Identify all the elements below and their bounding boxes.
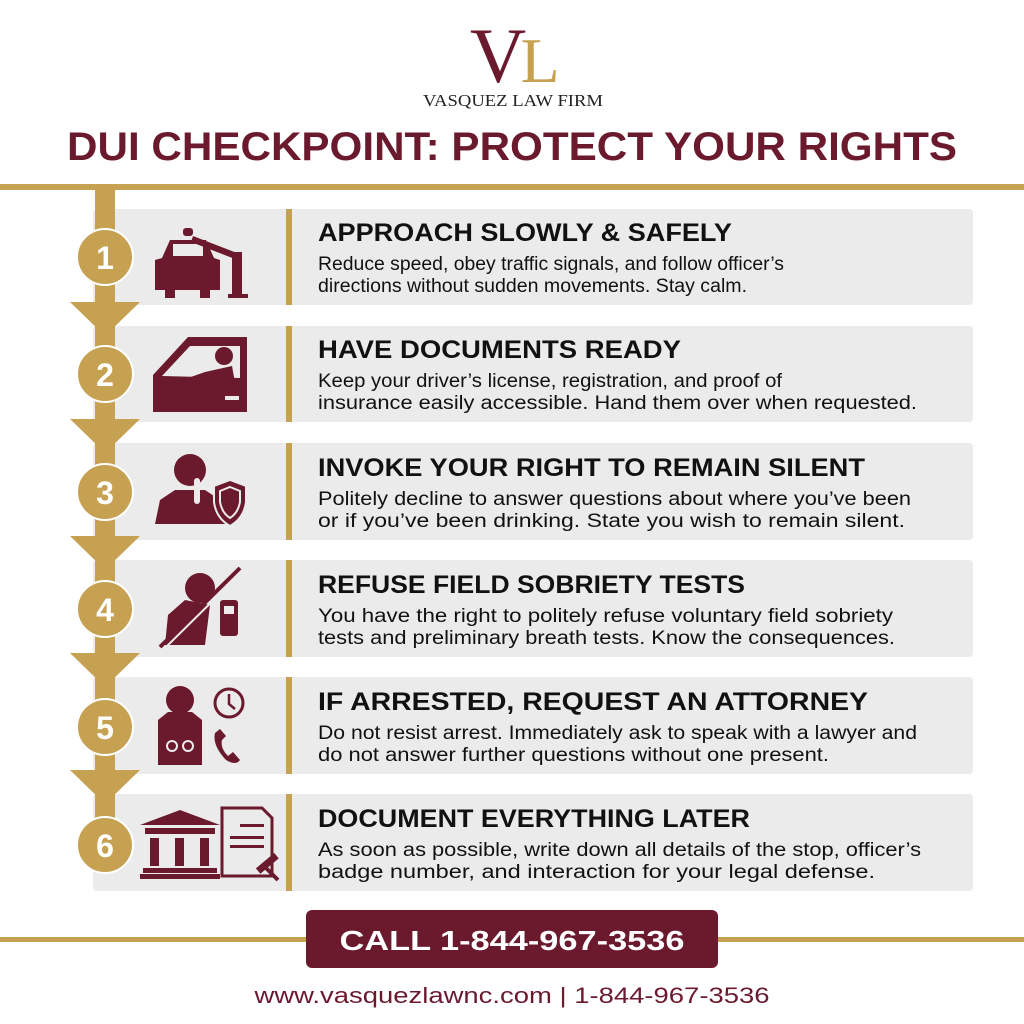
step texts: Do not resist arrest. Immediately ask to speak with a lawyer and <box>318 723 917 744</box>
icon: silent with shield <box>155 454 246 526</box>
step texts: tests and preliminary breath tests. Know the consequences. <box>318 628 895 649</box>
step texts: INVOKE YOUR RIGHT TO REMAIN SILENT <box>318 454 865 482</box>
number circles: 3 <box>96 475 114 511</box>
step texts: Politely decline to answer questions about where you’ve been <box>318 489 911 510</box>
step texts: or if you’ve been drinking. State you wish to remain silent. <box>318 511 905 532</box>
step texts: Reduce speed, obey traffic signals, and follow officer’s <box>318 254 784 275</box>
step texts: You have the right to politely refuse voluntary field sobriety <box>318 606 894 627</box>
number circles: 6 <box>96 828 114 864</box>
logo: L <box>520 25 560 96</box>
icon: arrested, clock, phone <box>158 686 243 765</box>
number circles <box>77 229 133 873</box>
step texts: do not answer further questions without one present. <box>318 745 829 766</box>
step texts: badge number, and interaction for your legal defense. <box>318 862 875 883</box>
step texts: APPROACH SLOWLY & SAFELY <box>318 219 732 247</box>
logo: VASQUEZ LAW FIRM <box>423 91 603 110</box>
gold top rule <box>0 184 1024 190</box>
step texts: HAVE DOCUMENTS READY <box>318 336 681 364</box>
icon: driver with documents <box>153 337 247 412</box>
step texts: IF ARRESTED, REQUEST AN ATTORNEY <box>318 688 868 716</box>
step texts: DOCUMENT EVERYTHING LATER <box>318 805 750 833</box>
icon: car at checkpoint <box>155 228 248 298</box>
step texts: insurance easily accessible. Hand them over when requested. <box>318 393 917 414</box>
number circles: 1 <box>96 240 114 276</box>
icon: courthouse and document <box>140 808 279 880</box>
number circles: 5 <box>96 710 114 746</box>
icon: refuse breath test <box>160 568 243 650</box>
step texts: directions without sudden movements. Stay calm. <box>318 276 747 297</box>
step texts: Keep your driver’s license, registration, and proof of <box>318 371 783 392</box>
logo: V <box>470 12 526 99</box>
logo <box>423 12 603 110</box>
gold bottom rule <box>0 937 1024 942</box>
step texts: As soon as possible, write down all details of the stop, officer’s <box>318 840 921 861</box>
step texts: REFUSE FIELD SOBRIETY TESTS <box>318 571 745 599</box>
number circles: 2 <box>96 357 114 393</box>
cards <box>93 209 973 891</box>
timeline <box>70 187 140 847</box>
call button: CALL 1-844-967-3536 <box>340 925 684 956</box>
step texts <box>318 219 921 883</box>
call button <box>306 910 718 968</box>
footer: www.vasquezlawnc.com | 1-844-967-3536 <box>253 983 770 1008</box>
title: DUI CHECKPOINT: PROTECT YOUR RIGHTS <box>67 125 957 169</box>
number circles: 4 <box>96 592 114 628</box>
